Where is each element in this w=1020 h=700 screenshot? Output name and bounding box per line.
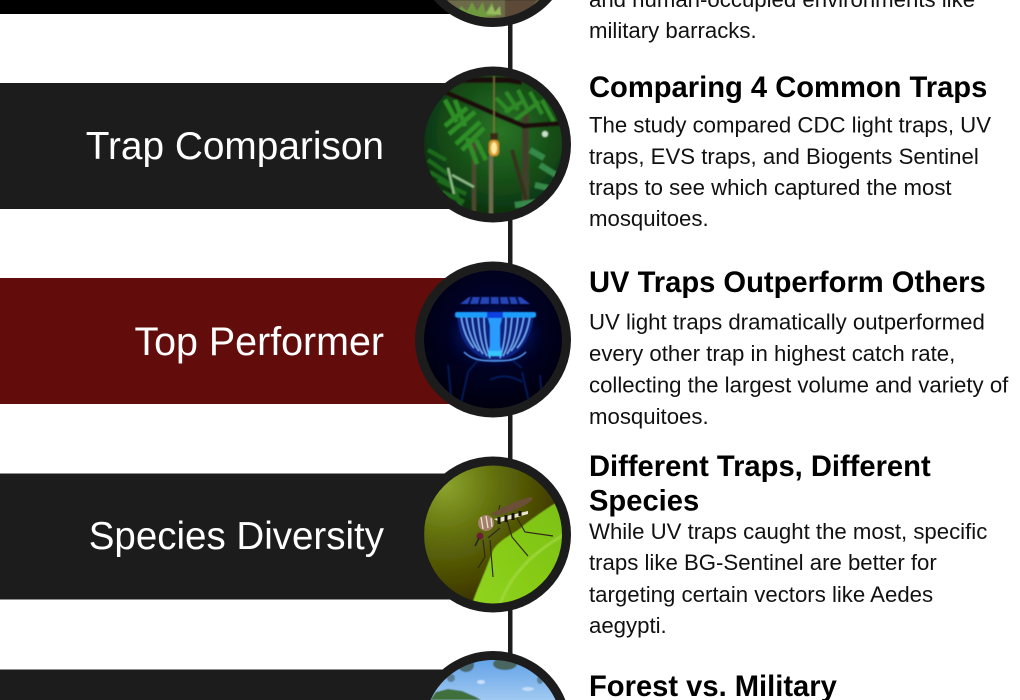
icon: forest and sky photo: [421, 651, 565, 700]
description: different traps: aegypti.: [589, 613, 667, 638]
bar label: trap comparison: Trap Comparison: [86, 125, 384, 168]
icon: hanging lantern in forest: [415, 66, 571, 222]
panel: forest vs military: [0, 651, 838, 700]
panel: previous section: [0, 0, 975, 43]
panel: trap comparison: [0, 66, 991, 231]
description: UV traps: every other trap in highest catch rate,: [589, 341, 955, 366]
bar label: species diversity: Species Diversity: [89, 515, 385, 558]
bar label: top performer: Top Performer: [134, 320, 384, 364]
label bar: forest vs military: [0, 670, 470, 700]
icon: mosquito on leaf: [415, 456, 571, 612]
description: comparing traps: The study compared CDC light traps, UV: [589, 112, 991, 138]
description: different traps: targeting certain vectors like Aedes: [589, 582, 933, 607]
heading: different traps: Different Traps, Different: [589, 451, 931, 483]
icon: forest floor photo: [434, 0, 552, 27]
description: comparing traps: [589, 112, 991, 231]
description: UV traps: collecting the largest volume and variety of: [589, 372, 1009, 398]
heading: different traps: [589, 451, 931, 518]
description: comparing traps: mosquitoes.: [589, 206, 709, 231]
description: UV traps: UV light traps dramatically outperformed: [589, 310, 985, 335]
heading: different traps: Species: [589, 486, 699, 518]
timeline spine: [508, 0, 512, 700]
label bar: top performer: [0, 278, 470, 404]
description: different traps: traps like BG-Sentinel are better for: [589, 550, 937, 575]
description: previous section: military barracks.: [589, 18, 757, 43]
description: different traps: [589, 519, 987, 638]
label bar: trap comparison: [0, 83, 470, 209]
description: UV traps: [589, 310, 1009, 429]
icon: glowing UV trap: [415, 262, 571, 418]
description: comparing traps: traps to see which captured the most: [589, 175, 952, 200]
heading: UV traps: UV Traps Outperform Others: [589, 267, 986, 299]
heading: comparing traps: Comparing 4 Common Traps: [589, 72, 987, 104]
panel: top performer: [0, 262, 1009, 429]
description: previous section: [589, 0, 975, 43]
description: UV traps: mosquitoes.: [589, 404, 709, 429]
description: different traps: While UV traps caught the most, specific: [589, 519, 987, 544]
label bar: species diversity: [0, 474, 470, 600]
panel: species diversity: [0, 451, 987, 638]
description: comparing traps: traps, EVS traps, and Biogents Sentinel: [589, 144, 979, 169]
label bar: previous section: [0, 0, 470, 14]
